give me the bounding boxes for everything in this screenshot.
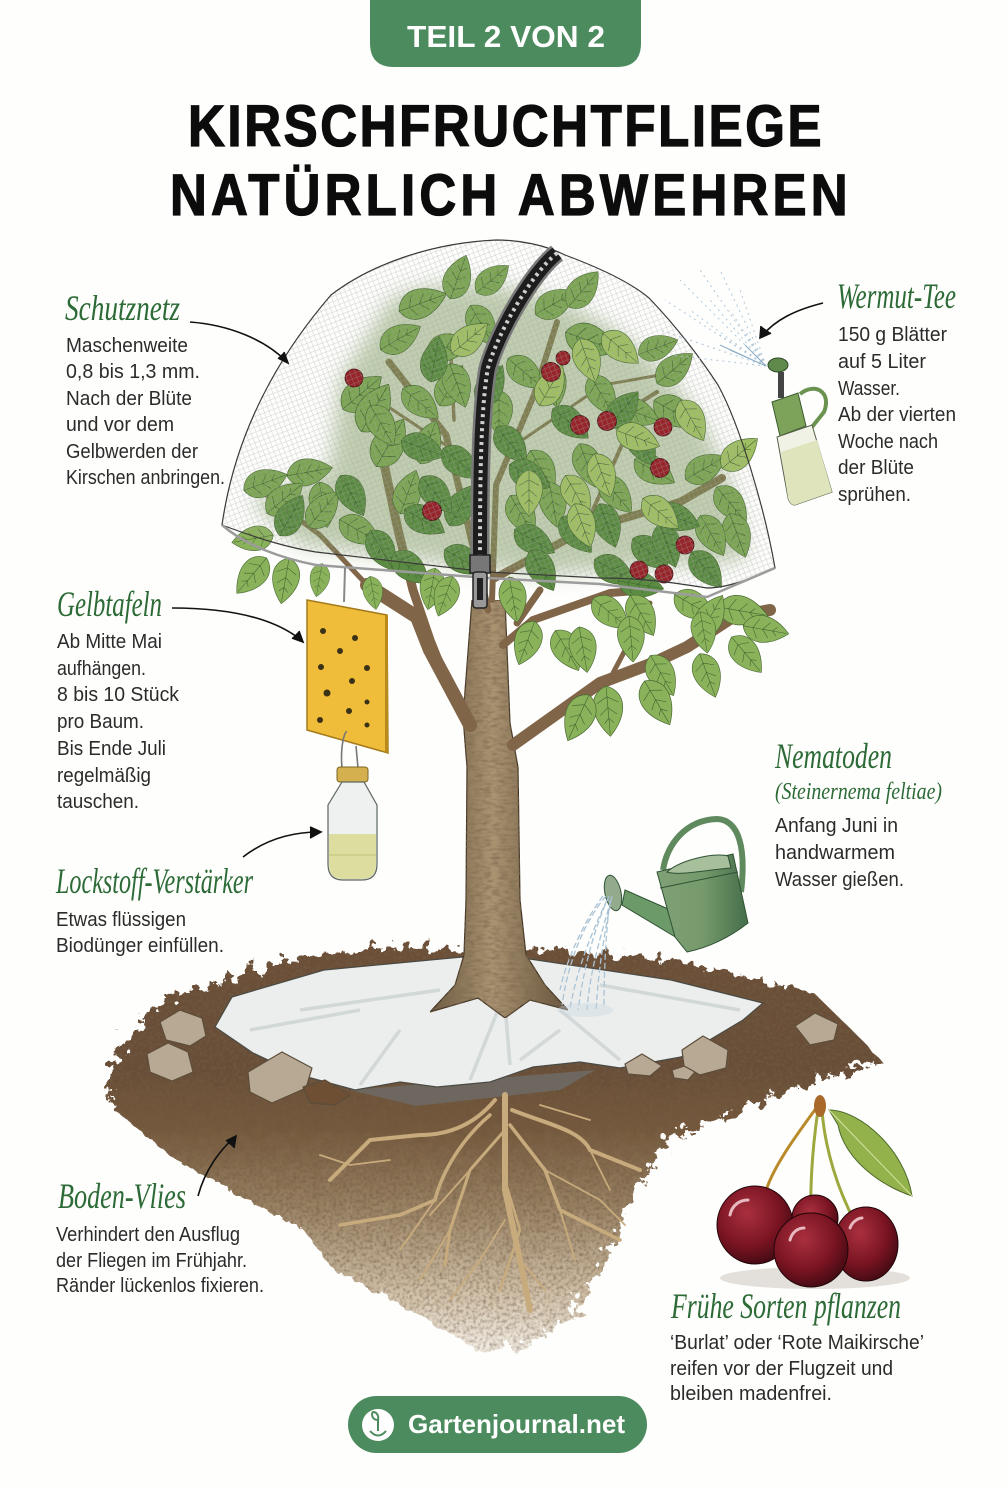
arrow: Gelbtafeln [172,608,303,642]
label: Gelbtafeln: 8 bis 10 Stück [57,684,180,706]
label: Gelbtafeln: aufhängen. [57,658,146,680]
label: Boden-Vlies: der Fliegen im Frühjahr. [56,1250,247,1272]
label: Schutznetz [65,288,225,489]
label: Wermut-Tee: sprühen. [838,484,911,506]
label: Frühe Sorten pflanzen: bleiben madenfrei. [670,1383,832,1405]
zipper [470,253,557,608]
label: Nematoden: handwarmem [775,842,895,864]
label: Wermut-Tee: der Blüte [838,457,914,479]
foliage canopy [227,251,791,747]
label: Schutznetz: Nach der Blüte [66,388,192,410]
label: Gelbtafeln: Gelbtafeln [57,584,162,624]
label: Lockstoff-Verstärker: Lockstoff-Verstärker [55,861,254,901]
title: KIRSCHFRUCHTFLIEGE [188,94,822,159]
label: Boden-Vlies [56,1176,264,1297]
spray cloud [660,270,766,366]
label: Schutznetz: Maschenweite [66,335,188,357]
fleece sheet: Boden-Vlies [215,957,763,1106]
label: Nematoden: Wasser gießen. [775,869,904,891]
bait bottle trap [328,732,377,880]
label: Boden-Vlies: Verhindert den Ausflug [56,1224,240,1246]
label: Frühe Sorten pflanzen: reifen vor der Flugzeit und [670,1358,893,1380]
header badge [370,0,641,67]
label: Nematoden: (Steinernema feltiae) [775,779,942,805]
icon: leaf logo [362,1409,394,1441]
label: Gelbtafeln: Ab Mitte Mai [57,631,162,653]
label: Schutznetz: 0,8 bis 1,3 mm. [66,361,200,383]
arrow: Boden-Vlies [198,1136,236,1196]
label: Wermut-Tee: Wermut-Tee [837,276,956,316]
arrow: Schutznetz [190,322,288,363]
label: Boden-Vlies: Ränder lückenlos fixieren. [56,1275,264,1297]
protective net dome [222,240,775,597]
tree trunk [430,600,568,1018]
footer badge [348,1396,647,1453]
water stream [557,896,613,1017]
label: Schutznetz: Kirschen anbringen. [66,467,225,489]
title: NATÜRLICH ABWEHREN [170,163,848,228]
label: Frühe Sorten pflanzen: Frühe Sorten pflanzen [670,1286,901,1326]
cherries on the tree [345,351,694,583]
label: Wermut-Tee: Woche nach [838,431,938,453]
label: Gelbtafeln: Bis Ende Juli [57,738,166,760]
label: Wermut-Tee: Ab der vierten [838,404,956,426]
label: Frühe Sorten pflanzen: ‘Burlat’ oder ‘Rote Maikirsche’ [670,1332,924,1354]
label: Nematoden [774,736,942,891]
label: Nematoden: Nematoden [774,736,892,776]
cherries illustration [717,1095,912,1289]
label: Lockstoff-Verstärker: Biodünger einfüllen. [56,935,224,957]
yellow sticky trap [307,568,388,753]
arrow: Wermut-Tee [760,303,823,338]
label: Frühe Sorten pflanzen [670,1286,924,1405]
soil cross-section [110,947,880,1350]
label: Gelbtafeln: tauschen. [57,791,139,813]
rocks [147,1010,838,1105]
watering can [601,819,748,952]
label: Gelbtafeln: pro Baum. [57,711,144,733]
label: Lockstoff-Verstärker [55,861,254,957]
label: Schutznetz: Gelbwerden der [66,441,198,463]
label: Gelbtafeln: regelmäßig [57,765,151,787]
header badge: TEIL 2 VON 2 [407,19,605,54]
label: Wermut-Tee: Wasser. [838,378,900,400]
label: Schutznetz: und vor dem [66,414,174,436]
label: Gelbtafeln [57,584,180,813]
roots [320,1095,640,1310]
label: Wermut-Tee [837,276,956,506]
label: Schutznetz: Schutznetz [65,288,180,328]
title [170,94,848,228]
label: Nematoden: Anfang Juni in [775,815,898,837]
arrow: Lockstoff-Verstärker [243,827,321,857]
footer badge: Gartenjournal.net [408,1409,625,1439]
label: Wermut-Tee: 150 g Blätter [838,324,947,346]
label: Boden-Vlies: Boden-Vlies [58,1176,186,1216]
label: Lockstoff-Verstärker: Etwas flüssigen [56,909,186,931]
spray bottle with wormwood tea [768,358,832,505]
branches [260,322,770,745]
label: Wermut-Tee: auf 5 Liter [838,351,926,373]
